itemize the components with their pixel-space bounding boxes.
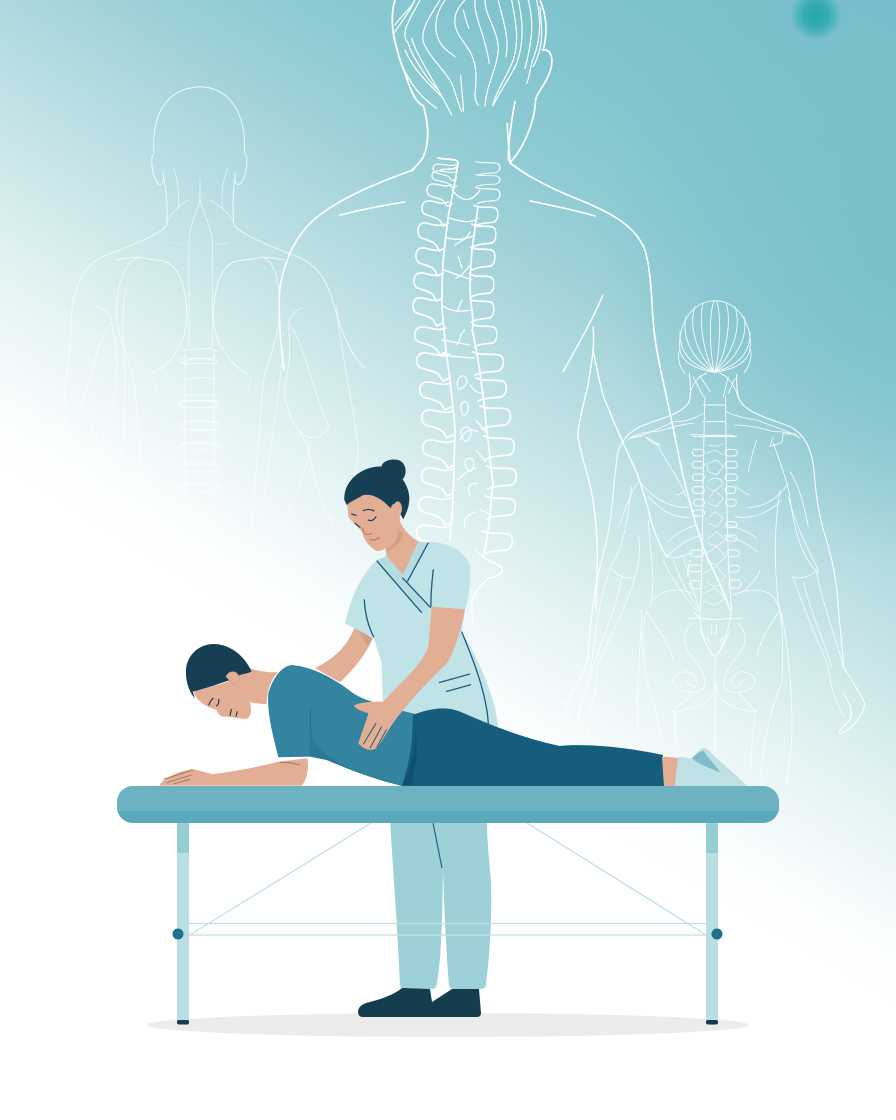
left anatomical back figure <box>55 87 365 527</box>
forearm <box>160 758 308 786</box>
ankle <box>662 757 680 786</box>
hair <box>344 467 409 519</box>
patient trousers <box>402 708 665 786</box>
right anatomical figure <box>566 301 865 783</box>
table top pad <box>117 786 779 823</box>
facial features <box>352 509 376 527</box>
patient neck and face <box>193 668 278 719</box>
therapist front arm and hand <box>354 607 465 750</box>
centre figure: torso outline <box>279 163 730 610</box>
back arm <box>315 627 373 682</box>
centre figure: hair and head <box>392 0 552 177</box>
background teal tint <box>596 0 896 560</box>
right figure: spine <box>688 397 742 657</box>
table cross braces <box>189 823 706 935</box>
patient face features <box>209 698 237 716</box>
foot <box>675 748 747 786</box>
patient lying on table <box>160 607 747 786</box>
teal glow spot <box>790 0 842 41</box>
table hinge dots <box>172 928 722 940</box>
left figure spine <box>180 348 219 518</box>
massage table shadow <box>147 1013 749 1037</box>
centre anatomical figure with spine <box>279 0 730 623</box>
collar <box>377 542 431 613</box>
nurse head <box>344 460 409 551</box>
physiotherapist upper body <box>315 460 498 750</box>
foot sole shading <box>692 751 721 773</box>
right figure: head and hair <box>679 301 751 398</box>
neck <box>383 515 418 578</box>
tunic <box>345 542 498 750</box>
patient shirt <box>268 665 427 786</box>
patient hair <box>186 644 252 698</box>
ear <box>393 501 402 516</box>
patient ear <box>226 672 239 684</box>
massage table <box>117 786 779 1024</box>
centre figure: spine vertebrae <box>413 158 516 623</box>
right figure: neck and shoulders <box>566 373 691 735</box>
hair bun <box>381 460 406 479</box>
physiotherapist trousers <box>390 820 491 989</box>
table legs <box>177 823 718 1024</box>
tunic seams <box>364 543 488 724</box>
physiotherapist shoes <box>358 988 481 1017</box>
